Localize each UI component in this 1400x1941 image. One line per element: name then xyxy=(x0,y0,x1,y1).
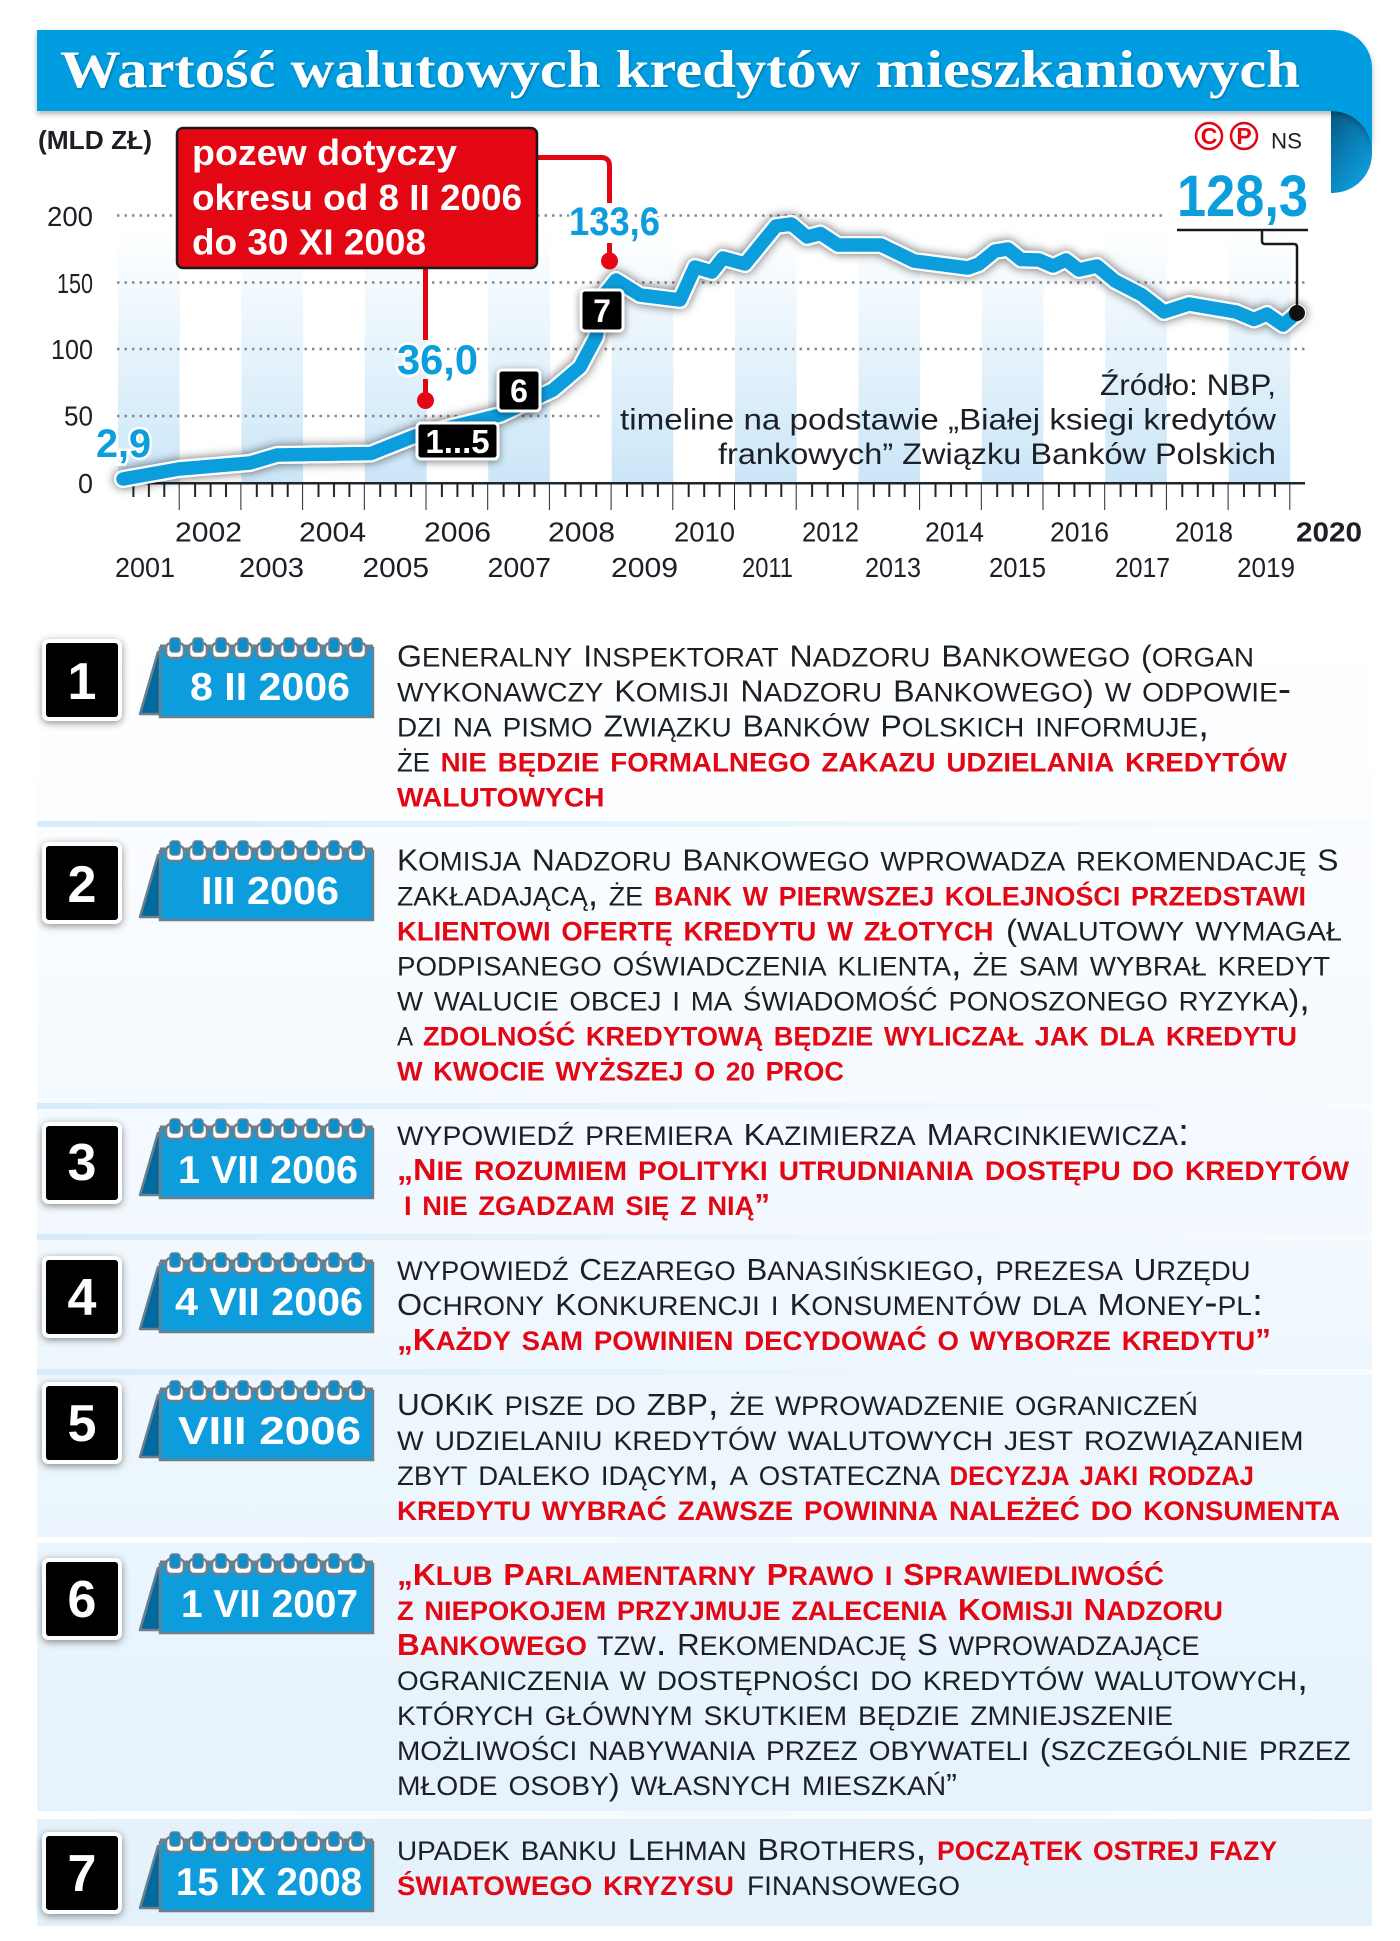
calendar date 1 VII 2007: 1 VII 2007 xyxy=(181,1583,358,1626)
title banner xyxy=(37,30,1372,193)
calendar date 1 VII 2007 xyxy=(140,1554,373,1633)
number badge 6 xyxy=(44,1560,120,1638)
x axis labels: 2017 xyxy=(1115,552,1170,583)
x axis labels: 2003 xyxy=(239,552,304,583)
calendar date 1 VII 2006: 1 VII 2006 xyxy=(178,1149,358,1192)
timeline entry 2 xyxy=(44,838,1342,1090)
marker 133,6 connector xyxy=(538,158,618,270)
x axis labels: 2005 xyxy=(362,552,429,583)
entry 3 text xyxy=(397,1112,1350,1224)
entry 6 text: ograniczenia w dostępności do kredytów walutowych, xyxy=(397,1657,1308,1699)
entry 6 text: możliwości nabywania przez obywateli (szczególnie przez xyxy=(397,1727,1351,1769)
entry 5 text: w udzielaniu kredytów walutowych jest rozwiązaniem xyxy=(397,1417,1304,1459)
callout: lawsuit period: do 30 XI 2008 xyxy=(192,222,426,262)
entry 2 text: a xyxy=(397,1013,413,1055)
entry 6 text xyxy=(397,1552,1351,1804)
entry 5 text: UOKiK pisze do ZBP, że wprowadzenie ograniczeń xyxy=(397,1382,1198,1424)
copyright marks: P xyxy=(1236,123,1252,149)
entry 5 text: kredytu wybrać zawsze powinna należeć do konsumenta xyxy=(397,1487,1340,1529)
calendar date 15 IX 2008 xyxy=(140,1832,373,1911)
marker box 6: 6 xyxy=(510,373,528,409)
x axis xyxy=(118,482,1305,510)
entry 1 text: Generalny Inspektorat Nadzoru Bankowego (organ xyxy=(397,634,1254,676)
entry 5 text xyxy=(397,1382,1340,1529)
banner fold xyxy=(1331,105,1372,193)
x axis labels: 2020 xyxy=(1296,516,1362,548)
x axis labels: 2001 xyxy=(115,552,175,583)
y axis labels xyxy=(47,201,93,499)
copyright marks: NS xyxy=(1271,128,1302,154)
endpoint dot xyxy=(1289,305,1305,321)
calendar date 4 VII 2006: 4 VII 2006 xyxy=(175,1281,363,1324)
marker 36,0 connector xyxy=(417,269,434,409)
entry 7 text xyxy=(397,1827,1277,1904)
entry 4 text: „Każdy sam powinien decydować o wyborze kredytu ” xyxy=(397,1317,1271,1359)
calendar date 8 II 2006 xyxy=(140,638,373,717)
calendar date III 2006: III 2006 xyxy=(201,870,339,913)
entry 6 text: młode osoby ) własnych mieszkań ” xyxy=(397,1762,957,1804)
entry 2 text: (walutowy wymagał xyxy=(1006,908,1342,950)
entry 2 text: Komisja Nadzoru Bankowego wprowadza rekomendację S xyxy=(397,838,1338,880)
entry 6 text: „Klub Parlamentarny Prawo i Sprawiedliwość xyxy=(397,1552,1164,1594)
number badge 4 xyxy=(44,1258,120,1336)
marker box 6 xyxy=(498,370,540,411)
y axis labels: 200 xyxy=(47,201,93,232)
entry 2 text xyxy=(397,838,1342,1090)
entry 2 text: zakładającą, że xyxy=(397,873,643,915)
chart xyxy=(38,123,1362,583)
calendar date 1 VII 2006 xyxy=(140,1119,373,1198)
x axis labels: 2006 xyxy=(424,516,491,548)
number badge 1: 1 xyxy=(68,653,96,711)
number badge 6: 6 xyxy=(68,1571,96,1629)
marker box 7: 7 xyxy=(593,293,611,329)
copyright marks: C xyxy=(1201,123,1217,149)
entry 1 text: nie będzie formalnego zakazu udzielania kredytów xyxy=(441,739,1288,781)
calendar date 15 IX 2008: 15 IX 2008 xyxy=(176,1861,362,1904)
entry 3 text: wypowiedź premiera Kazimierza Marcinkiewicza: xyxy=(397,1112,1189,1154)
callout: lawsuit period: okresu od 8 II 2006 xyxy=(192,177,522,218)
x axis labels: 2011 xyxy=(742,552,793,583)
x axis labels: 2016 xyxy=(1050,516,1109,548)
entry 5 text: decyzja jaki rodzaj xyxy=(950,1452,1254,1494)
timeline entry 5 xyxy=(44,1381,1340,1529)
source note: timeline na podstawie „Białej ksiegi kredytów xyxy=(620,404,1276,436)
number badge 5 xyxy=(44,1384,120,1462)
timeline entry 4 xyxy=(44,1247,1271,1359)
x axis labels: 2014 xyxy=(925,516,984,548)
entry 7 text: upadek banku Lehman Brothers, xyxy=(397,1827,926,1869)
entry 4 text: Ochrony Konkurencji i Konsumentów dla Money-pl: xyxy=(397,1282,1263,1324)
number badge 7 xyxy=(44,1834,120,1912)
x axis labels: 2004 xyxy=(299,516,366,548)
entry 2 text: podpisanego oświadczenia klienta, że sam wybrał kredyt xyxy=(397,943,1330,985)
number badge 1 xyxy=(44,641,120,719)
x axis labels xyxy=(115,516,1362,583)
source note: frankowych” Związku Banków Polskich xyxy=(718,438,1276,471)
entry 1 text xyxy=(397,634,1291,816)
number badge 4: 4 xyxy=(68,1269,97,1327)
entry 3 text: i nie zgadzam się z nią” xyxy=(404,1182,770,1224)
x axis labels: 2010 xyxy=(674,516,735,548)
entry 6 text: tzw. Rekomendację S wprowadzające xyxy=(597,1622,1200,1664)
entry 1 text: dzi na pismo Związku Banków Polskich informuje, xyxy=(397,704,1209,746)
x axis labels: 2013 xyxy=(865,552,921,583)
copyright marks xyxy=(1196,123,1302,154)
number badge 3: 3 xyxy=(68,1134,96,1192)
marker box 1...5: 1...5 xyxy=(425,423,490,460)
entry 2 text: w walucie obcej i ma świadomość ponoszonego ryzyka ), xyxy=(397,978,1310,1020)
entry 2 text: klientowi ofertę kredytu w złotych xyxy=(397,908,994,950)
entry 7 text: początek ostrej fazy xyxy=(937,1827,1277,1869)
number badge 5: 5 xyxy=(68,1395,96,1453)
y axis labels: 100 xyxy=(51,334,93,365)
entry 7 text: finansowego xyxy=(747,1862,960,1904)
timeline entry 3 xyxy=(44,1112,1350,1224)
entry 5 text: zbyt daleko idącym, a ostateczna xyxy=(397,1452,940,1494)
value 36,0: 36,0 xyxy=(397,336,478,383)
x axis labels: 2002 xyxy=(175,516,242,548)
x axis labels: 2015 xyxy=(989,552,1046,583)
x axis labels: 2008 xyxy=(548,516,615,548)
calendar date 4 VII 2006 xyxy=(140,1253,373,1332)
entry 6 text: których głównym skutkiem będzie zmniejszenie xyxy=(397,1692,1173,1734)
entry 4 text xyxy=(397,1247,1271,1359)
x axis labels: 2012 xyxy=(802,516,859,548)
source note: Źródło: NBP, xyxy=(1100,369,1276,402)
callout: lawsuit period xyxy=(177,128,537,268)
calendar date 8 II 2006: 8 II 2006 xyxy=(190,666,350,709)
title: Wartość walutowych kredytów mieszkaniowych xyxy=(60,41,1300,99)
entry 6 text: z niepokojem przyjmuje zalecenia Komisji Nadzoru xyxy=(397,1587,1223,1629)
entry 6 text: Bankowego xyxy=(397,1622,587,1664)
value 133,6: 133,6 xyxy=(569,200,660,244)
entry 1 text: wykonawczy Komisji Nadzoru Bankowego) w odpowie- xyxy=(397,669,1291,711)
entry 3 text: „Nie rozumiem polityki utrudniania dostępu do kredytów xyxy=(397,1147,1350,1189)
value 128,3: 128,3 xyxy=(1177,164,1308,229)
timeline entry 6 xyxy=(44,1552,1351,1804)
entry 2 text: zdolność kredytową będzie wyliczał jak dla kredytu xyxy=(423,1013,1297,1055)
entry 1 text: walutowych xyxy=(397,774,604,816)
entry 4 text: wypowiedź Cezarego Banasińskiego, prezesa Urzędu xyxy=(397,1247,1250,1289)
entry 7 text: światowego kryzysu xyxy=(397,1862,734,1904)
chart stripes xyxy=(118,230,1290,483)
x axis labels: 2009 xyxy=(611,552,678,583)
x axis labels: 2007 xyxy=(488,552,551,583)
entry 1 text: że xyxy=(397,739,430,781)
number badge 3 xyxy=(44,1124,120,1202)
data line xyxy=(123,224,1297,479)
timeline entry 7 xyxy=(44,1827,1277,1912)
y axis labels: 0 xyxy=(78,468,93,499)
marker box 7 xyxy=(581,290,623,331)
entry 2 text: bank w pierwszej kolejności przedstawi xyxy=(654,873,1306,915)
entry 2 text: w kwocie wyższej o 20 proc xyxy=(397,1048,844,1090)
number badge 2 xyxy=(44,844,120,922)
timeline background xyxy=(37,625,1372,1926)
banner bar xyxy=(37,30,1372,153)
number badge 2: 2 xyxy=(68,856,96,914)
calendar date III 2006 xyxy=(140,841,373,920)
number badge 7: 7 xyxy=(68,1845,96,1903)
calendar date VIII 2006: VIII 2006 xyxy=(178,1410,361,1453)
source note xyxy=(620,369,1276,471)
calendar date VIII 2006 xyxy=(140,1381,373,1460)
connector to 128,3 xyxy=(1177,230,1308,310)
y axis labels: 50 xyxy=(64,400,93,432)
timeline entry 1 xyxy=(44,634,1291,816)
y axis labels: 150 xyxy=(57,268,93,299)
x axis labels: 2019 xyxy=(1237,552,1295,583)
unit label: (MLD ZŁ) xyxy=(38,125,152,155)
callout: lawsuit period: pozew dotyczy xyxy=(192,132,457,173)
value 2,9: 2,9 xyxy=(96,422,151,466)
x axis labels: 2018 xyxy=(1175,516,1233,548)
